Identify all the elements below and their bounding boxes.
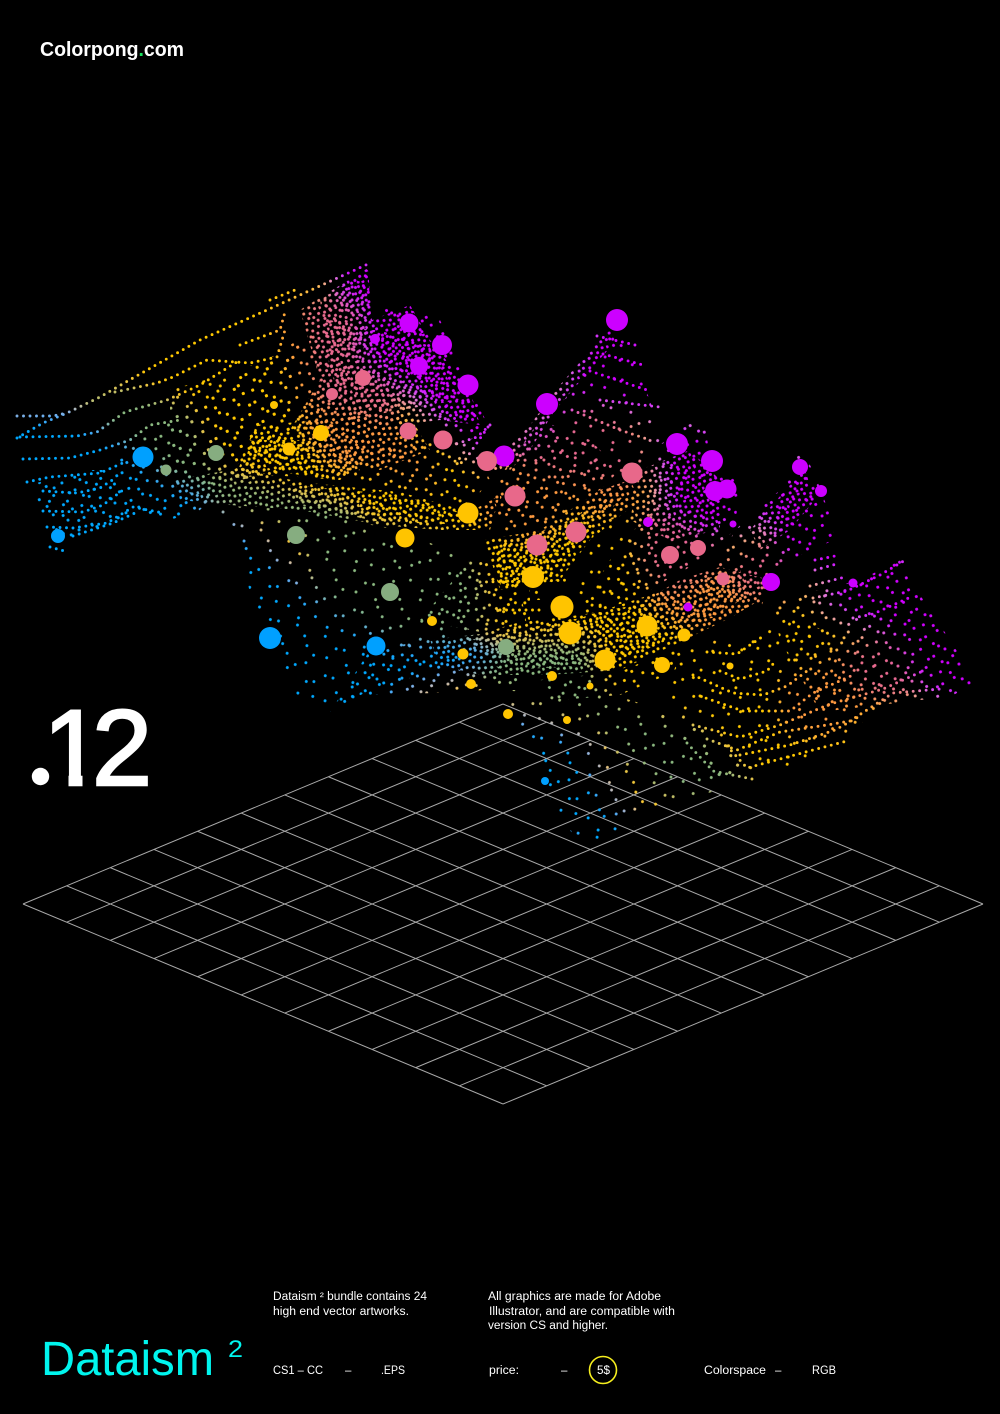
issue number xyxy=(32,708,148,786)
compatibility description xyxy=(488,1291,675,1332)
bundle description: Dataism ² bundle contains 24 xyxy=(273,1291,428,1303)
format info: – xyxy=(345,1365,352,1377)
format info: .EPS xyxy=(381,1365,405,1377)
pink data points xyxy=(326,370,730,586)
isometric grid xyxy=(23,704,983,1104)
compatibility description: Illustrator, and are compatible with xyxy=(489,1306,675,1318)
issue number: . xyxy=(31,719,50,797)
yellow data points xyxy=(270,401,734,724)
issue number: 1 xyxy=(43,687,103,808)
compatibility description: All graphics are made for Adobe xyxy=(488,1291,661,1303)
brand logo: Colorpong.com xyxy=(40,39,184,61)
blue data points xyxy=(51,446,549,785)
title: Dataism xyxy=(41,1333,214,1386)
bundle description: high end vector artworks. xyxy=(273,1306,409,1318)
dotted terrain surface xyxy=(16,264,971,839)
title: 2 xyxy=(228,1336,243,1363)
format info xyxy=(273,1365,405,1377)
format info: CS1 – CC xyxy=(273,1365,323,1377)
data point circles xyxy=(51,309,858,785)
colorspace info: – xyxy=(775,1365,782,1377)
colorspace info: Colorspace xyxy=(704,1365,766,1377)
colorspace info xyxy=(704,1365,836,1377)
price info: – xyxy=(561,1365,568,1377)
price info: 5$ xyxy=(597,1365,611,1377)
price info: price: xyxy=(489,1365,519,1377)
price info xyxy=(489,1356,616,1384)
colorspace info: RGB xyxy=(812,1365,836,1377)
issue number: 2 xyxy=(92,687,152,808)
magenta data points xyxy=(370,309,858,612)
green data points xyxy=(160,445,514,655)
compatibility description: version CS and higher. xyxy=(488,1320,608,1332)
bundle description xyxy=(273,1291,428,1318)
